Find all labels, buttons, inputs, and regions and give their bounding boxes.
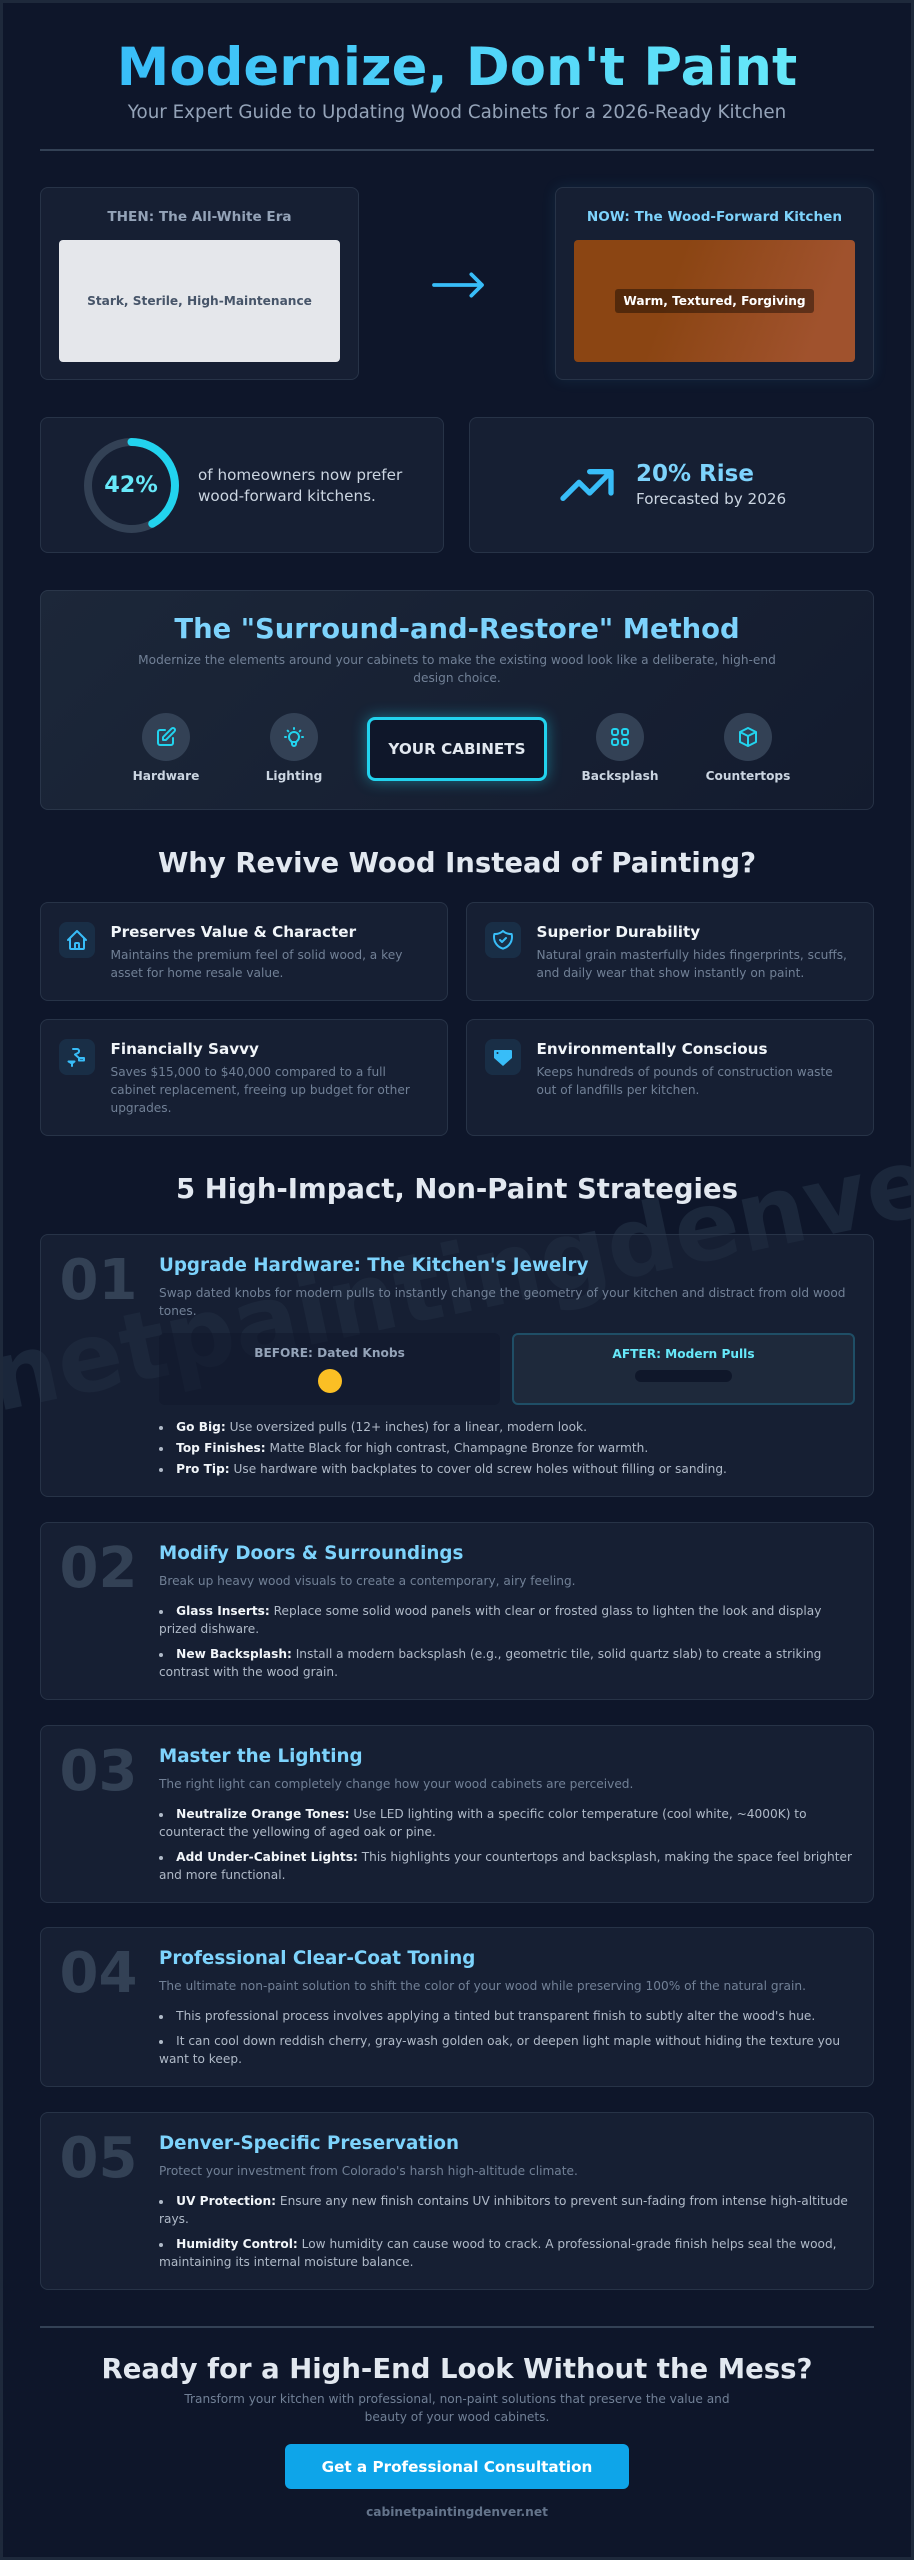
strategy title: Denver-Specific Preservation bbox=[159, 2133, 459, 2154]
center box: your cabinets bbox=[367, 717, 547, 781]
stat text: wood-forward kitchens. bbox=[198, 486, 376, 504]
card: durability bbox=[466, 902, 874, 1001]
strategy text: Protect your investment from Colorado's harsh high-altitude climate. bbox=[159, 2164, 578, 2178]
panel: now bbox=[555, 187, 874, 380]
panel: then bbox=[40, 187, 359, 380]
card: environmentally conscious bbox=[466, 1019, 874, 1136]
panel: strategy 03 bbox=[40, 1725, 874, 1903]
method text bbox=[138, 653, 776, 685]
card text: and daily wear that show instantly on paint. bbox=[536, 966, 804, 980]
strategy title: Modify Doors & Surroundings bbox=[159, 1543, 463, 1564]
panel: strategy 01 bbox=[40, 1234, 874, 1497]
center box: your cabinets: YOUR CABINETS bbox=[388, 740, 526, 758]
icon: knob bbox=[318, 1369, 342, 1393]
card text bbox=[536, 948, 847, 980]
bullet list: Add Under-Cabinet Lights: This highlights your countertops and backsplash, making the space feel brighter bbox=[176, 1850, 852, 1864]
heading: why revive: Why Revive Wood Instead of Painting? bbox=[158, 847, 756, 879]
cta button: Get a Professional Consultation bbox=[322, 2458, 592, 2476]
site url: cabinetpaintingdenver.net bbox=[366, 2505, 548, 2519]
cta text: beauty of your wood cabinets. bbox=[365, 2410, 549, 2424]
strategy text bbox=[159, 1286, 846, 1318]
cta text: Transform your kitchen with professional, non-paint solutions that preserve the value and bbox=[184, 2392, 730, 2406]
rise caption: Forecasted by 2026 bbox=[636, 490, 786, 508]
stat text bbox=[198, 466, 402, 504]
bullet list: It can cool down reddish cherry, gray-wash golden oak, or deepen light maple without hiding the texture you bbox=[176, 2034, 840, 2048]
icon: backsplash bbox=[596, 713, 644, 761]
now swatch bbox=[574, 240, 855, 362]
card text bbox=[110, 948, 402, 980]
bullet list bbox=[159, 1807, 852, 1882]
icon: home bbox=[59, 922, 95, 958]
card text: upgrades. bbox=[110, 1101, 171, 1115]
icon: hardware bbox=[142, 713, 190, 761]
card title: Preserves Value & Character bbox=[110, 923, 356, 941]
bullet list: Pro Tip: Use hardware with backplates to cover old screw holes without filling or sanding. bbox=[176, 1462, 727, 1476]
bullet list: want to keep. bbox=[159, 2052, 242, 2066]
bullet list bbox=[159, 1604, 821, 1679]
number: 01 bbox=[60, 1248, 137, 1313]
now badge: Warm, Textured, Forgiving bbox=[623, 294, 806, 308]
card: preserves value bbox=[40, 902, 448, 1001]
icon: arrow bbox=[432, 272, 484, 298]
card text: out of landfills per kitchen. bbox=[536, 1083, 699, 1097]
card text bbox=[536, 1064, 833, 1097]
bullet list: This professional process involves applying a tinted but transparent finish to subtly alter the wood's hue. bbox=[176, 2009, 815, 2023]
icon: shield bbox=[485, 922, 521, 958]
title: Modernize, Don't Paint bbox=[117, 37, 797, 98]
bullet list: New Backsplash: Install a modern backsplash (e.g., geometric tile, solid quartz slab) to create a striking bbox=[176, 1647, 821, 1661]
strategy title: Professional Clear-Coat Toning bbox=[159, 1948, 475, 1969]
method text: design choice. bbox=[413, 671, 501, 685]
bullet list: maintaining its internal moisture balance. bbox=[159, 2255, 413, 2269]
number: 03 bbox=[60, 1739, 137, 1804]
method heading: The "Surround-and-Restore" Method bbox=[174, 614, 740, 645]
now badge bbox=[615, 289, 814, 313]
bullet list bbox=[159, 2009, 840, 2066]
rise value: 20% Rise bbox=[636, 461, 754, 487]
icon: savings bbox=[59, 1039, 95, 1075]
icon: countertops bbox=[724, 713, 772, 761]
card title: Environmentally Conscious bbox=[536, 1040, 768, 1058]
panel: stat 42% bbox=[40, 417, 444, 553]
heading: strategies: 5 High-Impact, Non-Paint Strategies bbox=[176, 1173, 738, 1205]
bullet list: Glass Inserts: Replace some solid wood panels with clear or frosted glass to lighten the look and display bbox=[176, 1604, 821, 1618]
bullet list: and more functional. bbox=[159, 1868, 285, 1882]
panel: strategy 02 bbox=[40, 1522, 874, 1700]
strategy title: Master the Lighting bbox=[159, 1746, 363, 1767]
panel: strategy 04 bbox=[40, 1927, 874, 2087]
icon: tag bbox=[485, 1039, 521, 1075]
then swatch bbox=[59, 240, 340, 362]
icon: lighting bbox=[270, 713, 318, 761]
bullet list: Go Big: Use oversized pulls (12+ inches) for a linear, modern look. bbox=[176, 1420, 587, 1434]
card text: Saves $15,000 to $40,000 compared to a full bbox=[110, 1064, 386, 1078]
card text: Keeps hundreds of pounds of construction waste bbox=[536, 1064, 833, 1078]
card text: cabinet replacement, freeing up budget for other bbox=[110, 1083, 410, 1097]
strategy title: Upgrade Hardware: The Kitchen's Jewelry bbox=[159, 1255, 588, 1276]
card text bbox=[110, 1064, 410, 1115]
bullet list: Humidity Control: Low humidity can cause wood to crack. A professional-grade finish helps seal the wood, bbox=[176, 2237, 837, 2251]
after box bbox=[512, 1333, 855, 1405]
card title: Financially Savvy bbox=[110, 1040, 259, 1058]
countertops label: Countertops bbox=[706, 769, 790, 783]
panel: strategy 05 bbox=[40, 2112, 874, 2290]
cta heading: Ready for a High-End Look Without the Mess? bbox=[102, 2353, 812, 2385]
number: 02 bbox=[60, 1536, 137, 1601]
then swatch: Stark, Sterile, High-Maintenance bbox=[87, 294, 312, 308]
icon: trending up bbox=[560, 469, 614, 501]
icon: pull bbox=[635, 1370, 732, 1382]
bullet list: UV Protection: Ensure any new finish contains UV inhibitors to prevent sun-fading from intense high-altitude bbox=[176, 2194, 848, 2208]
donut chart bbox=[84, 438, 179, 533]
card title: Superior Durability bbox=[536, 923, 700, 941]
now label: NOW: The Wood-Forward Kitchen bbox=[587, 209, 842, 225]
then label: THEN: The All-White Era bbox=[107, 209, 292, 225]
backsplash label: Backsplash bbox=[582, 769, 658, 783]
number: 05 bbox=[60, 2126, 137, 2191]
method text: Modernize the elements around your cabinets to make the existing wood look like a deliberate, high-end bbox=[138, 653, 776, 667]
bullet list bbox=[159, 2194, 848, 2269]
card: financially savvy bbox=[40, 1019, 448, 1136]
strategy text: tones. bbox=[159, 1304, 197, 1318]
strategy text: Swap dated knobs for modern pulls to instantly change the geometry of your kitchen and distract from old wood bbox=[159, 1286, 846, 1300]
bullet list bbox=[159, 1420, 727, 1476]
bullet list: Neutralize Orange Tones: Use LED lighting with a specific color temperature (cool white, ~4000K) to bbox=[176, 1807, 807, 1821]
cta text bbox=[184, 2392, 730, 2424]
strategy text: Break up heavy wood visuals to create a contemporary, airy feeling. bbox=[159, 1574, 576, 1588]
bullet list: Top Finishes: Matte Black for high contrast, Champagne Bronze for warmth. bbox=[176, 1441, 648, 1455]
cta button bbox=[285, 2444, 629, 2489]
lighting label: Lighting bbox=[266, 769, 322, 783]
donut value: 42% bbox=[104, 472, 158, 498]
after label: AFTER: Modern Pulls bbox=[612, 1347, 755, 1361]
card text: Maintains the premium feel of solid wood, a key bbox=[110, 948, 402, 962]
strategy text: The ultimate non-paint solution to shift the color of your wood while preserving 100% of the natural grain. bbox=[159, 1979, 806, 1993]
card text: asset for home resale value. bbox=[110, 966, 283, 980]
panel: method bbox=[40, 590, 874, 810]
hardware label: Hardware bbox=[133, 769, 199, 783]
number: 04 bbox=[60, 1941, 137, 2006]
strategy text: The right light can completely change how your wood cabinets are perceived. bbox=[159, 1777, 633, 1791]
bullet list: counteract the yellowing of aged oak or pine. bbox=[159, 1825, 436, 1839]
before box bbox=[159, 1333, 500, 1405]
bullet list: rays. bbox=[159, 2212, 189, 2226]
bullet list: contrast with the wood grain. bbox=[159, 1665, 338, 1679]
stat text: of homeowners now prefer bbox=[198, 466, 402, 484]
panel: stat rise bbox=[469, 417, 874, 553]
bullet list: prized dishware. bbox=[159, 1622, 259, 1636]
before label: BEFORE: Dated Knobs bbox=[254, 1346, 405, 1360]
subtitle: Your Expert Guide to Updating Wood Cabinets for a 2026-Ready Kitchen bbox=[128, 102, 786, 123]
card text: Natural grain masterfully hides fingerprints, scuffs, bbox=[536, 948, 847, 962]
